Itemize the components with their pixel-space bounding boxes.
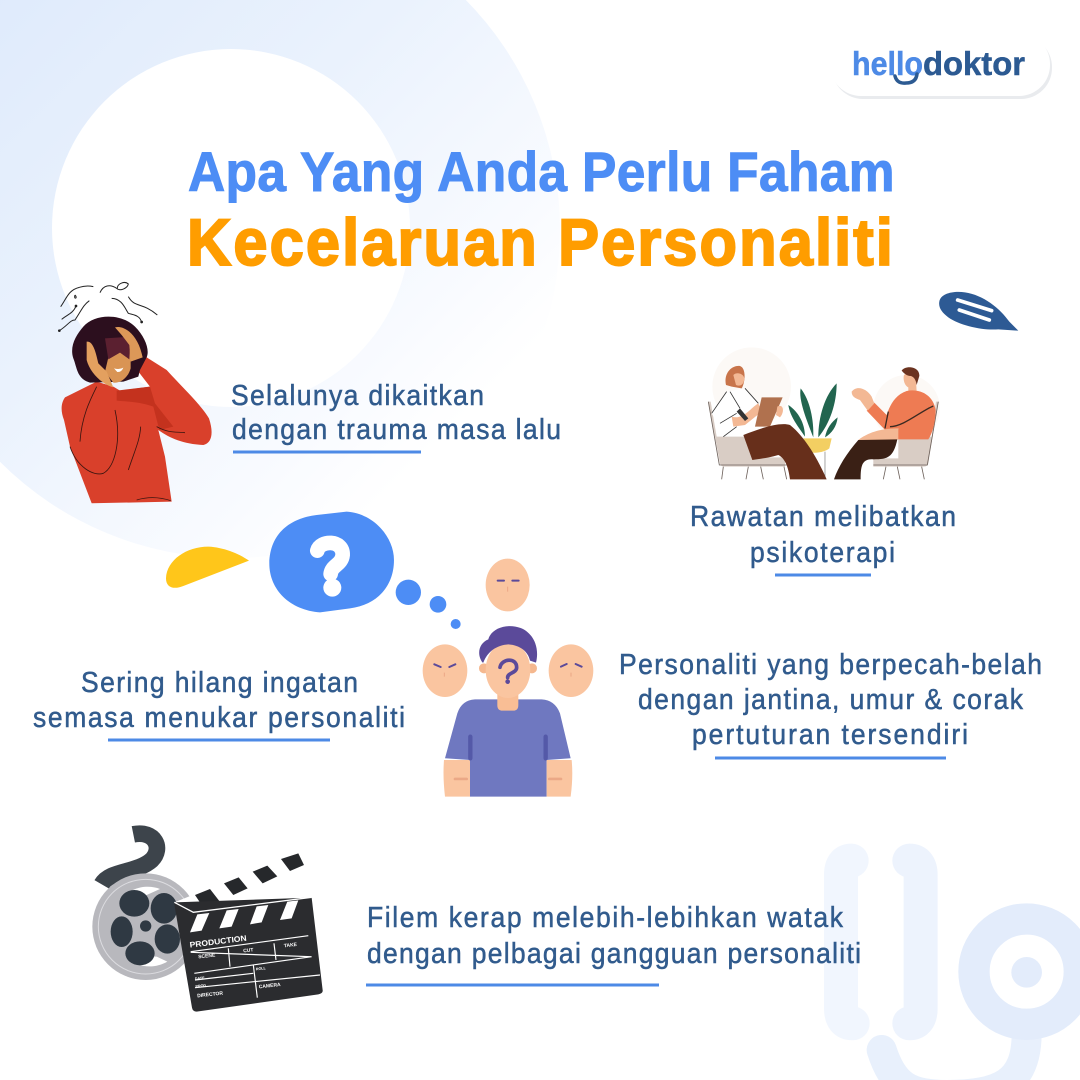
- icon: clapperboard: PRODUCTION: [189, 934, 247, 950]
- text: personaliti berpecah: pertuturan tersendiri: [692, 718, 968, 750]
- icon: speech leaf: [939, 292, 1018, 331]
- icon: clapperboard: TAKE: [284, 942, 298, 949]
- icon: clapperboard: SCENE: [198, 952, 216, 960]
- icon: therapy session: [708, 347, 940, 479]
- text: filem: dengan pelbagai gangguan personaliti: [367, 937, 861, 969]
- text: psikoterapi: [690, 500, 956, 568]
- icon: clapperboard: PROD: [195, 984, 207, 989]
- icon: clapperboard: ROLL: [256, 966, 267, 971]
- text: trauma: [231, 379, 561, 445]
- text: filem: [367, 901, 861, 969]
- icon: stressed woman: [58, 283, 212, 503]
- icon: question bubble: [269, 512, 394, 612]
- watermark logo: [841, 861, 1079, 1080]
- logo wordmark: doktor: [923, 45, 1025, 82]
- title: Kecelaruan Personaliti: [187, 205, 893, 279]
- text: psikoterapi: Rawatan melibatkan: [690, 500, 956, 532]
- text: psikoterapi: psikoterapi: [750, 536, 895, 568]
- text: filem: Filem kerap melebih-lebihkan watak: [367, 901, 843, 933]
- text: personaliti berpecah: dengan jantina, umur & corak: [638, 683, 1023, 715]
- logo wordmark: hello: [852, 45, 923, 82]
- text: hilang ingatan: [33, 666, 405, 733]
- icon: clapperboard: [174, 853, 323, 1012]
- logo wordmark: [852, 45, 1025, 83]
- icon: clapperboard: DIRECTOR: [197, 991, 224, 999]
- icon: yellow leaf: [166, 547, 249, 588]
- icon: clapperboard: CAMERA: [259, 982, 281, 990]
- text: personaliti berpecah: Personaliti yang berpecah-belah: [619, 648, 1042, 680]
- text: hilang ingatan: Sering hilang ingatan: [81, 666, 358, 698]
- icon: confused man with faces: [396, 559, 593, 797]
- logo pill: [830, 33, 1052, 99]
- title: Apa Yang Anda Perlu Faham: [188, 141, 895, 203]
- icon: clapperboard: CUT: [243, 947, 254, 954]
- text: trauma: dengan trauma masa lalu: [232, 413, 561, 445]
- text: personaliti berpecah: [619, 648, 1042, 750]
- icon: film reel: [92, 834, 199, 980]
- icon: clapperboard: DATE: [195, 976, 205, 981]
- text: hilang ingatan: semasa menukar personaliti: [33, 701, 405, 733]
- title: [187, 141, 895, 279]
- background circle: [0, 0, 560, 558]
- text: trauma: Selalunya dikaitkan: [231, 379, 484, 411]
